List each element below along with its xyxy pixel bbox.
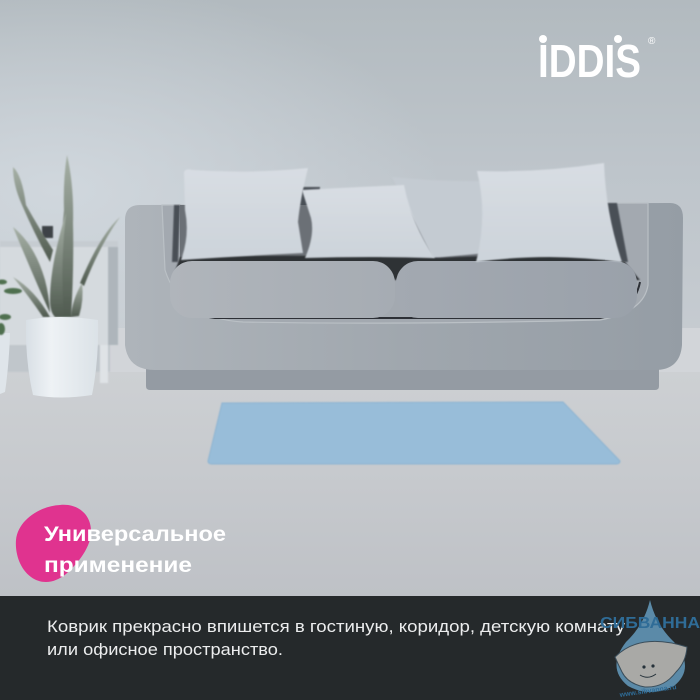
small pot left [0,333,10,394]
sofa body [125,203,683,370]
sofa base [146,366,659,390]
sofa [125,163,683,390]
plant pot [26,317,98,398]
side cabinet [0,226,118,383]
caption text: Коврик прекрасно впишется в гостиную, коридор, детскую комнату [47,617,626,636]
watermark: bath in drop [600,600,700,699]
heading [44,522,226,577]
sofa back shadow [172,187,628,262]
sofa seat recess [162,203,648,323]
heading: Универсальное [44,522,226,546]
plant leaves [13,155,120,317]
caption text [47,617,626,659]
pink blob [16,505,91,582]
cushion: right [396,261,637,318]
floor [0,372,700,598]
small plant left [0,280,22,335]
caption text: или офисное пространство. [47,640,283,659]
dark line under cushions [172,280,640,318]
watermark url: www.sibvanna.ru [618,684,677,699]
cushion: left [170,261,395,318]
dark seat gap [172,256,640,280]
potted plant [0,155,120,398]
pillow: right [476,163,622,262]
blue rug [208,402,620,464]
dark caption band [0,596,700,700]
pillow: centre [302,185,435,258]
logo: iddis: ® [648,36,656,47]
background wall [0,0,700,380]
water drop [616,600,685,692]
watermark text: СИБВАННА [600,615,700,632]
pillow: left [181,168,308,260]
logo: iddis: IDDIS [538,35,641,87]
heading: применение [44,553,192,577]
pillow: back right [392,177,487,258]
mascot face [640,664,656,677]
bath mascot [615,641,687,687]
